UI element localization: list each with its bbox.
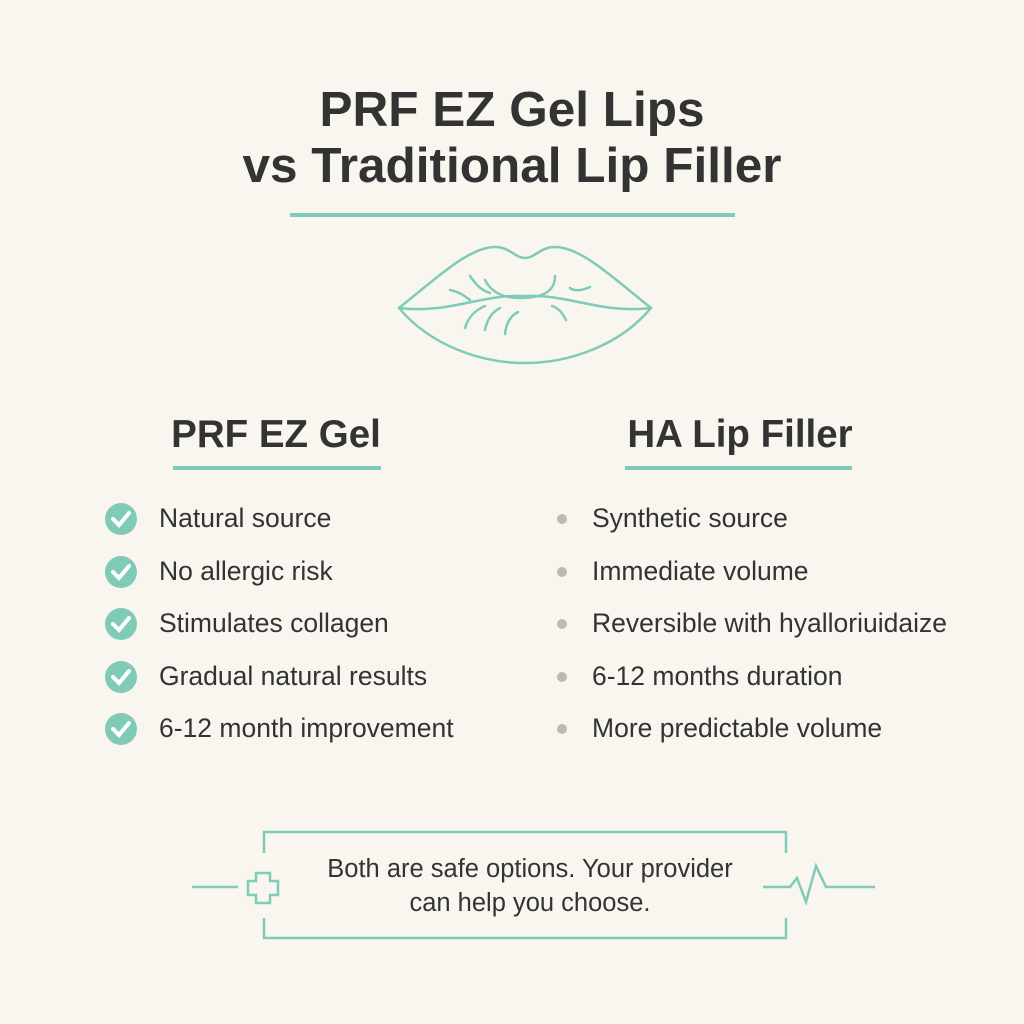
title <box>242 82 782 193</box>
list: PRF EZ Gel benefits <box>105 503 454 745</box>
list: PRF EZ Gel benefits: No allergic risk <box>159 556 333 586</box>
callout text <box>327 855 733 917</box>
list: PRF EZ Gel benefits: Gradual natural results <box>159 661 427 691</box>
list: HA Lip Filler traits: Immediate volume <box>592 556 809 586</box>
list: PRF EZ Gel benefits: Natural source <box>159 503 331 533</box>
callout text: can help you choose. <box>409 889 650 917</box>
list: HA Lip Filler traits: Synthetic source <box>592 503 788 533</box>
title: PRF EZ Gel Lips <box>319 82 705 137</box>
list: PRF EZ Gel benefits: 6-12 month improvement <box>159 713 454 743</box>
icon: lips <box>398 246 652 364</box>
heading: PRF EZ Gel: PRF EZ Gel <box>171 413 381 456</box>
list: HA Lip Filler traits: 6-12 months duration <box>592 661 842 691</box>
list: HA Lip Filler traits: Reversible with hyalloriuidaize <box>592 608 947 638</box>
list: PRF EZ Gel benefits: Stimulates collagen <box>159 608 389 638</box>
heading: HA Lip Filler: HA Lip Filler <box>627 413 853 456</box>
title: vs Traditional Lip Filler <box>242 138 782 193</box>
callout text: Both are safe options. Your provider <box>327 855 733 883</box>
title underline <box>290 213 735 217</box>
list: HA Lip Filler traits <box>557 503 947 743</box>
list: HA Lip Filler traits: More predictable volume <box>592 713 882 743</box>
callout box <box>192 830 875 940</box>
